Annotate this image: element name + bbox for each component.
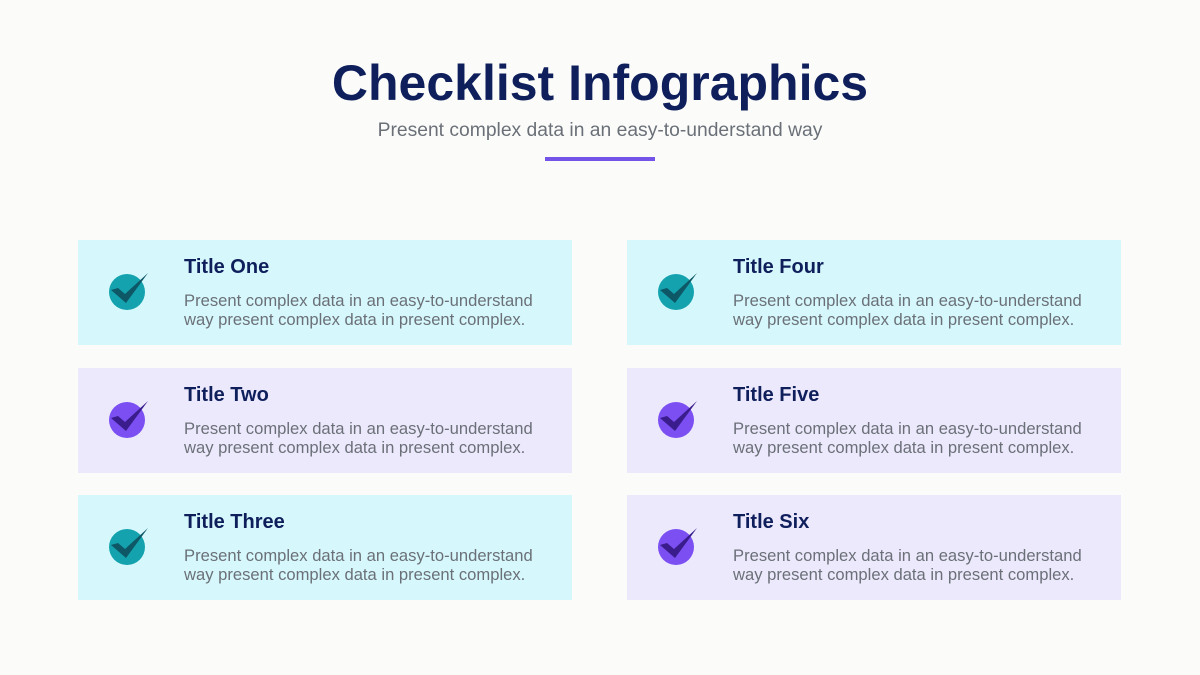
heading: Title Five (733, 384, 819, 406)
text (184, 419, 533, 457)
text: Present complex data in an easy-to-understand (184, 419, 533, 438)
text: way present complex data in present complex. (733, 310, 1074, 329)
text: Present complex data in an easy-to-understand (184, 291, 533, 310)
icon: teal check (109, 273, 148, 310)
text: Present complex data in an easy-to-understand (733, 419, 1082, 438)
heading: Title Three (184, 511, 285, 533)
title: Checklist Infographics (332, 55, 868, 111)
text: way present complex data in present complex. (184, 438, 525, 457)
text (184, 291, 533, 329)
text (733, 546, 1082, 584)
icon: purple check (658, 401, 697, 438)
text (733, 291, 1082, 329)
panel: title one (78, 240, 572, 345)
accent line (545, 157, 655, 161)
text: Present complex data in an easy-to-understand (733, 546, 1082, 565)
text: way present complex data in present complex. (733, 565, 1074, 584)
icon: teal check (658, 273, 697, 310)
panel: title six (627, 495, 1121, 600)
text: way present complex data in present complex. (733, 438, 1074, 457)
panel: title four (627, 240, 1121, 345)
text: way present complex data in present complex. (184, 310, 525, 329)
text: Present complex data in an easy-to-understand (184, 546, 533, 565)
text: Present complex data in an easy-to-understand (733, 291, 1082, 310)
heading: Title Four (733, 256, 824, 278)
panel: title two (78, 368, 572, 473)
panel: title three (78, 495, 572, 600)
icon: purple check (658, 528, 697, 565)
subtitle: Present complex data in an easy-to-understand way (378, 120, 822, 141)
icon: purple check (109, 401, 148, 438)
icon: teal check (109, 528, 148, 565)
text (184, 546, 533, 584)
heading: Title One (184, 256, 269, 278)
text: way present complex data in present complex. (184, 565, 525, 584)
heading: Title Two (184, 384, 269, 406)
heading: Title Six (733, 511, 809, 533)
text (733, 419, 1082, 457)
panel: title five (627, 368, 1121, 473)
